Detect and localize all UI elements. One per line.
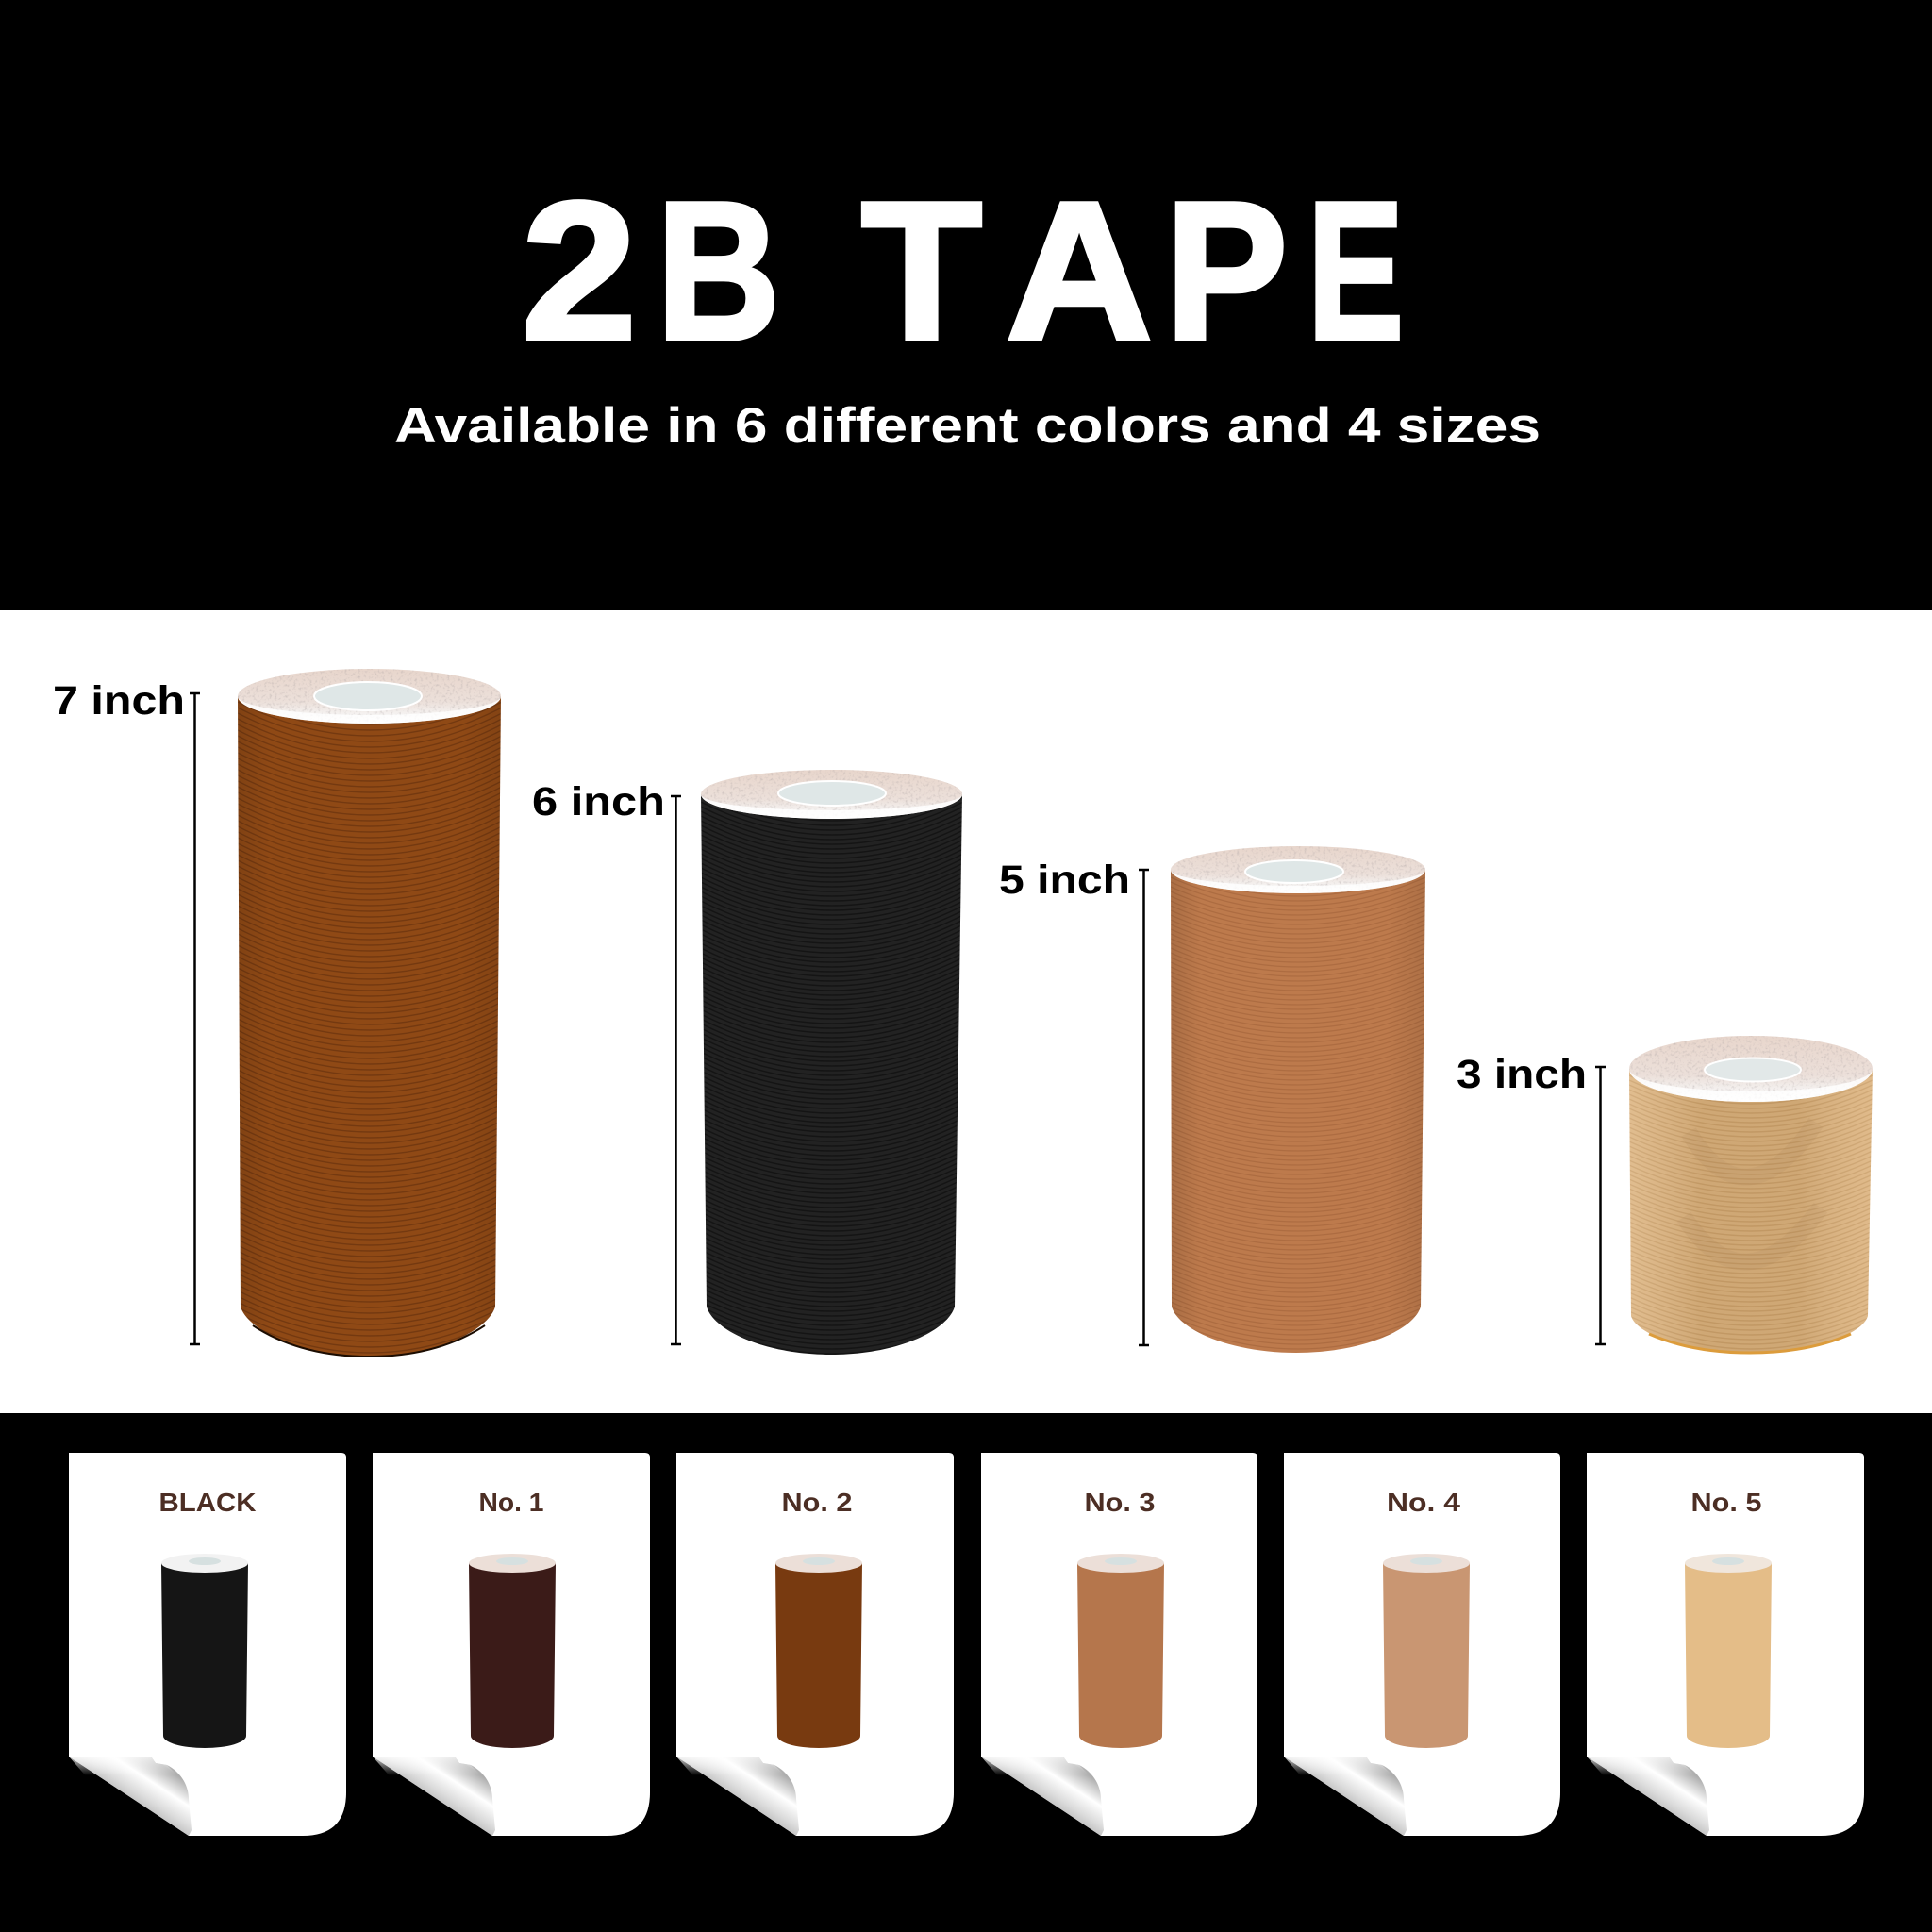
color card: No. 2 xyxy=(676,1453,954,1836)
dimension label: 7 inch: 7 inch xyxy=(53,678,185,724)
color card: No. 1 xyxy=(373,1453,650,1836)
color card: No. 1: No. 1 xyxy=(479,1488,543,1517)
dimension label: 5 inch xyxy=(999,858,1149,1345)
color card: No. 3 xyxy=(981,1453,1257,1836)
dimension label: 5 inch: 5 inch xyxy=(999,858,1130,903)
dimension label: 6 inch: 6 inch xyxy=(532,779,665,824)
color card: BLACK: BLACK xyxy=(158,1488,257,1517)
header band xyxy=(0,0,1932,610)
color card: No. 4: No. 4 xyxy=(1387,1488,1460,1517)
subtitle: Available in 6 different colors and 4 sizes xyxy=(394,398,1541,454)
title: 2 xyxy=(522,162,637,381)
dimension label: 6 inch xyxy=(532,779,681,1344)
roll: 6 inch xyxy=(701,770,962,1355)
title: T xyxy=(861,162,982,381)
color card: No. 2: No. 2 xyxy=(781,1488,853,1517)
color card: No. 5: No. 5 xyxy=(1690,1488,1762,1517)
dimension label: 3 inch xyxy=(1457,1052,1606,1344)
dimension label: 7 inch xyxy=(53,678,200,1344)
title: A xyxy=(1006,162,1153,381)
roll: 3 inch xyxy=(1629,1036,1873,1353)
panel: tape sizes xyxy=(53,669,1873,1357)
panel: color options band xyxy=(0,1413,1932,1932)
color card: No. 4 xyxy=(1284,1453,1560,1836)
roll: 7 inch xyxy=(238,669,501,1357)
color card: No. 5 xyxy=(1587,1453,1864,1836)
dimension label: 3 inch: 3 inch xyxy=(1457,1052,1587,1097)
color card: No. 3: No. 3 xyxy=(1085,1488,1155,1517)
color card: BLACK xyxy=(69,1453,346,1836)
title: P xyxy=(1165,162,1288,381)
title: E xyxy=(1307,162,1404,381)
title: B xyxy=(657,162,780,381)
roll: 5 inch xyxy=(1171,846,1425,1353)
